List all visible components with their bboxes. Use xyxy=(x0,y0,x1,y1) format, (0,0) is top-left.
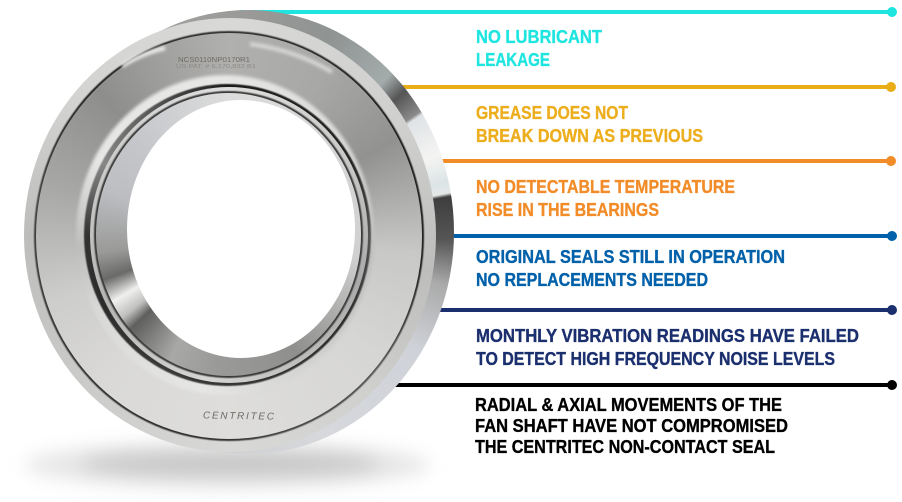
benefit: temperature: RISE IN THE BEARINGS xyxy=(476,200,659,220)
bore surface xyxy=(96,93,361,376)
benefit: grease: GREASE DOES NOT xyxy=(476,103,628,123)
bore opening xyxy=(127,100,355,358)
inner seal land xyxy=(90,87,368,383)
line: blue xyxy=(445,231,897,241)
benefit: vibration: MONTHLY VIBRATION READINGS HAVE FAILED xyxy=(476,326,859,346)
front rim xyxy=(24,18,436,452)
benefit: shaft movement: RADIAL & AXIAL MOVEMENTS OF THE xyxy=(475,395,782,415)
benefit: no leakage xyxy=(476,27,602,70)
engraving: patent: US PAT. # 6,170,832 B1 xyxy=(176,64,256,70)
line: yellow xyxy=(390,82,896,92)
benefit: shaft movement: FAN SHAFT HAVE NOT COMPROMISED xyxy=(475,416,788,436)
benefit: vibration: TO DETECT HIGH FREQUENCY NOISE LEVELS xyxy=(476,349,835,369)
benefit: seals xyxy=(476,247,785,290)
benefit: seals: ORIGINAL SEALS STILL IN OPERATION xyxy=(476,247,785,267)
line: navy xyxy=(435,305,897,315)
benefit: shaft movement: THE CENTRITEC NON-CONTACT SEAL xyxy=(475,437,775,457)
benefit: grease: BREAK DOWN AS PREVIOUS xyxy=(476,126,703,146)
inner lip bright band xyxy=(76,75,374,395)
thin seal line xyxy=(94,91,363,378)
face highlights xyxy=(120,41,334,74)
benefit: seals: NO REPLACEMENTS NEEDED xyxy=(476,270,708,290)
benefit: temperature: NO DETECTABLE TEMPERATURE xyxy=(476,177,735,197)
line: cyan xyxy=(240,7,897,17)
line: orange xyxy=(430,156,896,166)
line: black xyxy=(385,380,897,390)
benefit: temperature xyxy=(476,177,735,220)
benefit: vibration xyxy=(476,326,859,369)
benefit: no leakage: NO LUBRICANT xyxy=(476,27,602,47)
benefit: grease xyxy=(476,103,703,146)
face ring xyxy=(36,33,422,439)
inner seal groove xyxy=(84,84,371,386)
ground shadow core xyxy=(80,452,380,476)
outer side band xyxy=(42,10,454,454)
ground shadow wide xyxy=(25,442,430,488)
bearing illustration xyxy=(24,10,454,494)
engraving: part number: NCS0110NP0170R1 xyxy=(178,55,250,64)
benefit: no leakage: LEAKAGE xyxy=(476,50,550,70)
engraving: brand: CENTRITEC xyxy=(203,410,275,423)
benefit: shaft movement xyxy=(475,395,788,457)
outer groove xyxy=(34,31,424,441)
